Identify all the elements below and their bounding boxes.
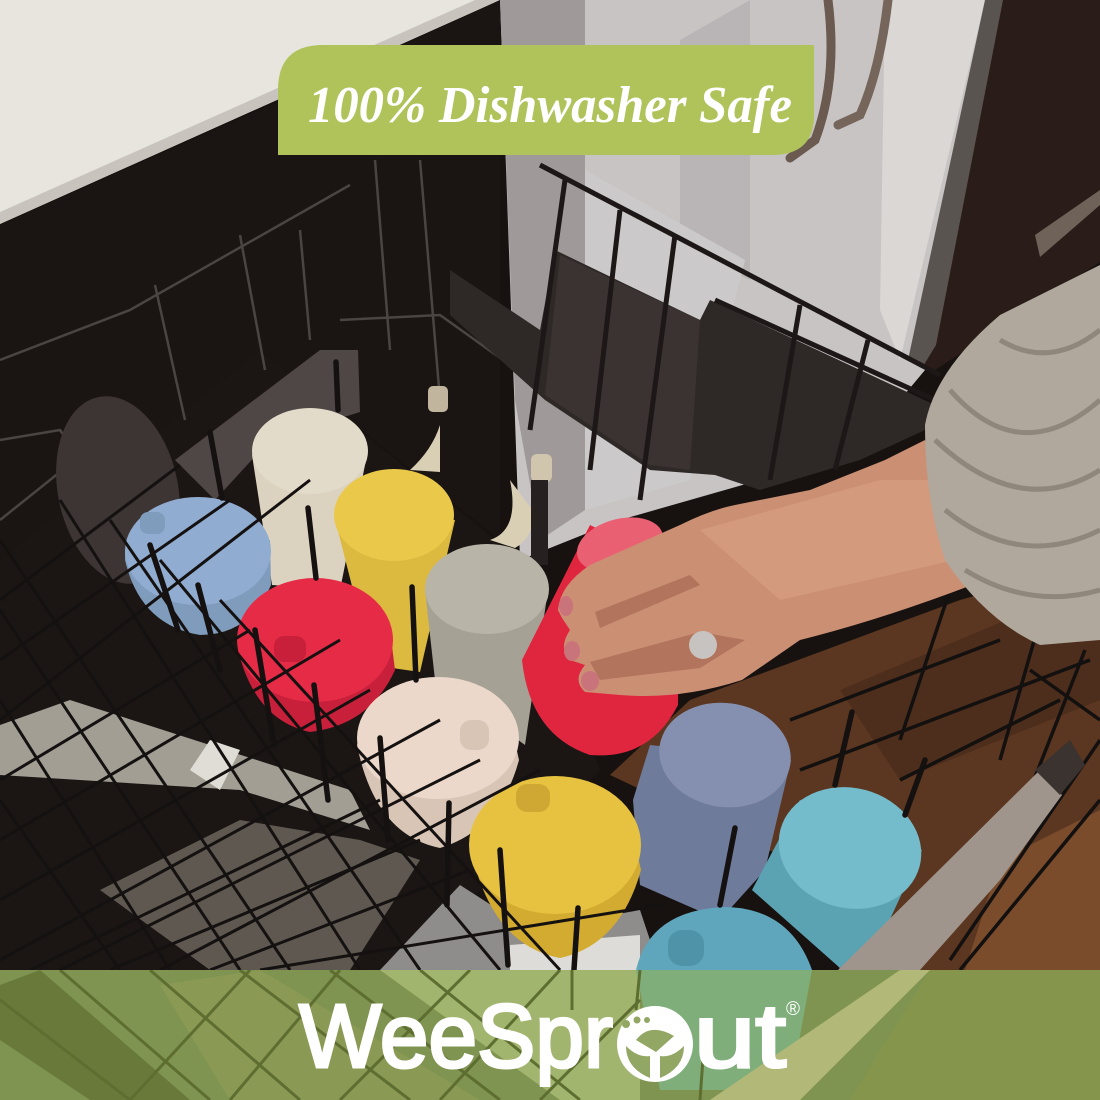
right rack wire over floor <box>790 590 1100 970</box>
cabinet door <box>500 0 1000 560</box>
black tines <box>150 362 925 1000</box>
interior shading <box>0 0 500 560</box>
yellow cup <box>334 469 455 672</box>
side door handle <box>1035 190 1100 257</box>
icon: fingernails <box>559 596 599 691</box>
yellow lid cup <box>469 776 641 958</box>
icon: sprout and footprint o <box>617 1006 693 1082</box>
registered mark: ® <box>786 999 800 1020</box>
pink lid cup <box>357 677 519 848</box>
sweater sleeve <box>925 265 1100 645</box>
teal lid cup <box>636 907 812 1040</box>
periwinkle cup <box>633 694 798 920</box>
logo: WeeSprout: ut <box>694 987 786 1087</box>
footer band <box>0 970 1100 1100</box>
banner <box>278 45 814 155</box>
hand <box>558 440 972 696</box>
dark side door <box>922 0 1100 370</box>
teal cup <box>752 771 935 968</box>
logo: WeeSprout <box>299 987 800 1087</box>
grey cup <box>425 544 549 745</box>
bottom rack and tines <box>0 465 660 970</box>
lower spray arm and tub floor <box>0 700 660 970</box>
red lid cup <box>237 578 395 732</box>
counter top <box>0 0 500 224</box>
upper rack wire <box>0 160 545 530</box>
banner heading: 100% Dishwasher Safe <box>308 77 792 134</box>
blue lid cup <box>125 497 271 635</box>
cabinet handles <box>790 0 888 158</box>
cream handles <box>410 386 552 565</box>
cream cup <box>252 408 368 590</box>
red cup in hand <box>522 508 680 755</box>
tines rack back panel <box>450 165 940 500</box>
dishwasher door rail <box>838 740 1085 970</box>
logo: WeeSprout: WeeSpr <box>299 987 613 1087</box>
filter dome and grey bottle <box>40 350 360 595</box>
wood floor <box>610 560 1100 970</box>
